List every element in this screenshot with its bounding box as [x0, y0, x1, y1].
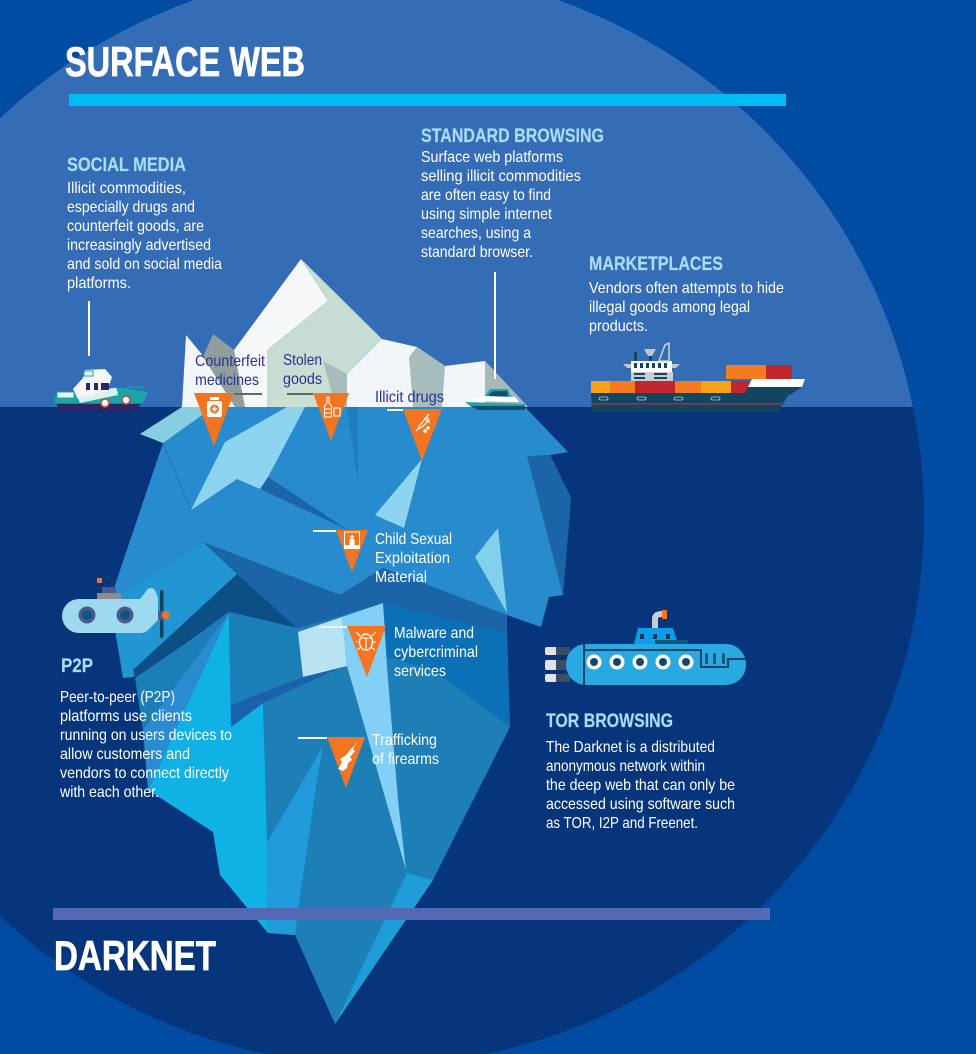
- marker: child sexual exploitation material: Exploitation: [375, 550, 450, 567]
- text block: TOR browsing: The Darknet is a distributed: [546, 739, 715, 756]
- marker: malware and cybercriminal services: [319, 625, 478, 680]
- text block: standard browsing: [421, 125, 604, 261]
- marker: stolen goods: Stolen: [283, 352, 322, 369]
- text block: marketplaces: illegal goods among legal: [589, 299, 750, 316]
- text block: social media: [67, 154, 222, 292]
- text block: marketplaces: MARKETPLACES: [589, 253, 723, 275]
- iceberg waterline body: [110, 407, 571, 633]
- marker: illicit drugs: [375, 389, 444, 461]
- text block: social media: Illicit commodities,: [67, 180, 186, 197]
- marker: malware and cybercriminal services: Malware and: [394, 625, 474, 642]
- text block: standard browsing: are often easy to find: [421, 187, 551, 204]
- leader line: social media: [88, 301, 90, 356]
- heading: darknet: DARKNET: [54, 932, 216, 979]
- icon: TOR submarine: [545, 610, 746, 685]
- text block: standard browsing: searches, using a: [421, 225, 531, 242]
- text block: TOR browsing: accessed using software such: [546, 796, 735, 813]
- marker: counterfeit medicines: medicines: [195, 372, 259, 389]
- marker: counterfeit medicines: [194, 353, 265, 446]
- marker: stolen goods: [283, 352, 349, 441]
- marker: trafficking of firearms: [298, 732, 439, 788]
- marker: stolen goods: goods: [283, 371, 322, 388]
- text block: marketplaces: [589, 253, 784, 335]
- marker: child sexual exploitation material: Child Sexual: [375, 531, 452, 548]
- text block: social media: SOCIAL MEDIA: [67, 154, 186, 176]
- marker: counterfeit medicines: Counterfeit: [195, 353, 265, 370]
- text block: marketplaces: products.: [589, 318, 648, 335]
- text block: standard browsing: standard browser.: [421, 244, 533, 261]
- text block: TOR browsing: anonymous network within: [546, 758, 705, 775]
- marker: illicit drugs: Illicit drugs: [375, 389, 444, 406]
- text block: TOR browsing: as TOR, I2P and Freenet.: [546, 815, 698, 832]
- text block: social media: and sold on social media: [67, 256, 222, 273]
- text block: social media: especially drugs and: [67, 199, 195, 216]
- text block: social media: increasingly advertised: [67, 237, 211, 254]
- text block: P2P: platforms use clients: [60, 708, 192, 725]
- text block: P2P: vendors to connect directly: [60, 765, 229, 782]
- icon: social media boat: [54, 369, 148, 412]
- darknet bar: [53, 908, 770, 920]
- text block: P2P: [59, 655, 232, 801]
- heading: surface web: SURFACE WEB: [65, 38, 305, 85]
- text block: P2P: allow customers and: [60, 746, 190, 763]
- iceberg tip above water: [182, 259, 528, 407]
- text block: P2P: with each other.: [59, 784, 159, 801]
- text block: marketplaces: Vendors often attempts to hide: [589, 280, 784, 297]
- text block: social media: platforms.: [67, 275, 131, 292]
- text block: standard browsing: STANDARD BROWSING: [421, 125, 604, 147]
- text block: P2P: Peer-to-peer (P2P): [60, 689, 175, 706]
- marker: malware and cybercriminal services: services: [394, 663, 446, 680]
- text block: TOR browsing: [546, 710, 735, 832]
- marker: child sexual exploitation material: [313, 530, 452, 586]
- text block: standard browsing: selling illicit commodities: [421, 168, 581, 185]
- text block: P2P: running on users devices to: [60, 727, 232, 744]
- leader line: standard browsing: [494, 272, 496, 379]
- iceberg: [110, 259, 571, 1024]
- icon: speedboat: [465, 389, 525, 410]
- text block: social media: counterfeit goods, are: [67, 218, 204, 235]
- text block: P2P: P2P: [61, 655, 93, 677]
- text block: TOR browsing: TOR BROWSING: [546, 710, 673, 732]
- marker: trafficking of firearms: of firearms: [372, 751, 439, 768]
- marker: malware and cybercriminal services: cybercriminal: [394, 644, 478, 661]
- surface web bar: [69, 94, 786, 106]
- marker: child sexual exploitation material: Material: [375, 569, 427, 586]
- icon: P2P submarine: [62, 578, 170, 638]
- marker: trafficking of firearms: Trafficking: [372, 732, 437, 749]
- text block: TOR browsing: the deep web that can only be: [546, 777, 735, 794]
- text block: standard browsing: using simple internet: [421, 206, 552, 223]
- icon: container ship: [591, 343, 805, 412]
- text block: standard browsing: Surface web platforms: [421, 149, 563, 166]
- iceberg lower body: [110, 542, 510, 1024]
